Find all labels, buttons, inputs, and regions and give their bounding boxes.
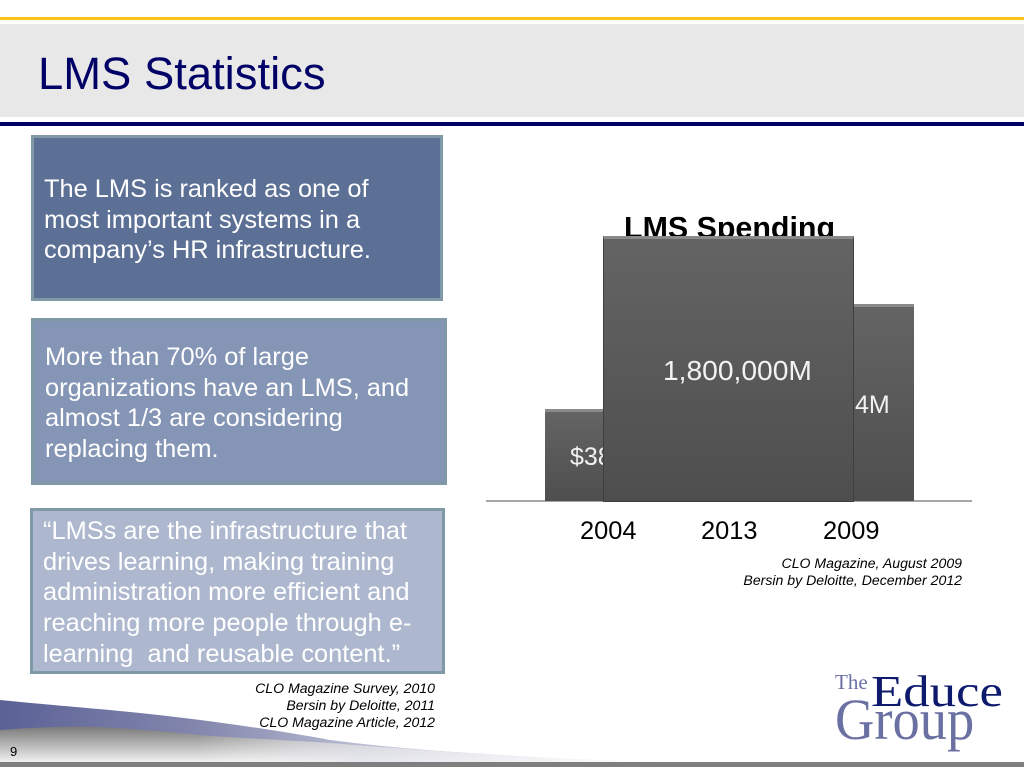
bar: 2013 [603, 236, 854, 502]
panel citations: CLO Magazine Survey, 2010 [255, 680, 435, 696]
chart: LMS spending [486, 211, 972, 502]
bar label 2013: 1,800,000M [663, 354, 812, 386]
chart citations: CLO Magazine, August 2009 [782, 555, 962, 571]
panel: adoption: More than 70% of large [45, 343, 309, 371]
panel: quote [30, 508, 445, 674]
panel: quote: drives learning, making training [43, 548, 394, 576]
footer rule [0, 762, 1024, 767]
chart citations [743, 555, 962, 588]
logo: The Educe Group [835, 667, 1003, 752]
panel: quote: reaching more people through e- [43, 609, 411, 637]
logo word The: The [835, 670, 868, 694]
title band [0, 24, 1024, 117]
panel: adoption: organizations have an LMS, and [45, 374, 409, 402]
title: LMS Statistics [38, 48, 326, 99]
panel: ranking: The LMS is ranked as one of [44, 175, 369, 203]
footer swoosh [0, 700, 613, 762]
panel: adoption [31, 318, 447, 485]
panel citations [255, 680, 435, 730]
chart title: LMS Spending [624, 211, 835, 245]
title rule [0, 122, 1024, 126]
panel: ranking: company’s HR infrastructure. [44, 236, 371, 264]
panel: ranking: most important systems in a [44, 206, 360, 234]
bar: 2004 [545, 409, 605, 501]
logo word Educe: Educe [871, 667, 1003, 716]
year label 2009: 2009 [823, 517, 879, 545]
year label 2013: 2013 [701, 517, 757, 545]
bar label 2009: 4M [855, 391, 890, 419]
logo word Group: Group [835, 687, 974, 752]
chart citations: Bersin by Deloitte, December 2012 [743, 572, 962, 588]
panel: quote: administration more efficient and [43, 578, 409, 606]
panel: ranking [31, 135, 443, 301]
year label 2004: 2004 [580, 517, 636, 545]
panel citations: Bersin by Deloitte, 2011 [286, 697, 435, 713]
slide number: 9 [10, 744, 17, 759]
top accent line [0, 17, 1024, 20]
axis line [486, 500, 972, 502]
panel: adoption: almost 1/3 are considering [45, 404, 343, 432]
panel: adoption: replacing them. [45, 435, 219, 463]
panel: quote: learning and reusable content.” [43, 640, 400, 668]
panel citations: CLO Magazine Article, 2012 [259, 714, 435, 730]
panel: quote: “LMSs are the infrastructure that [43, 517, 407, 545]
bar: 2009 [853, 304, 914, 501]
